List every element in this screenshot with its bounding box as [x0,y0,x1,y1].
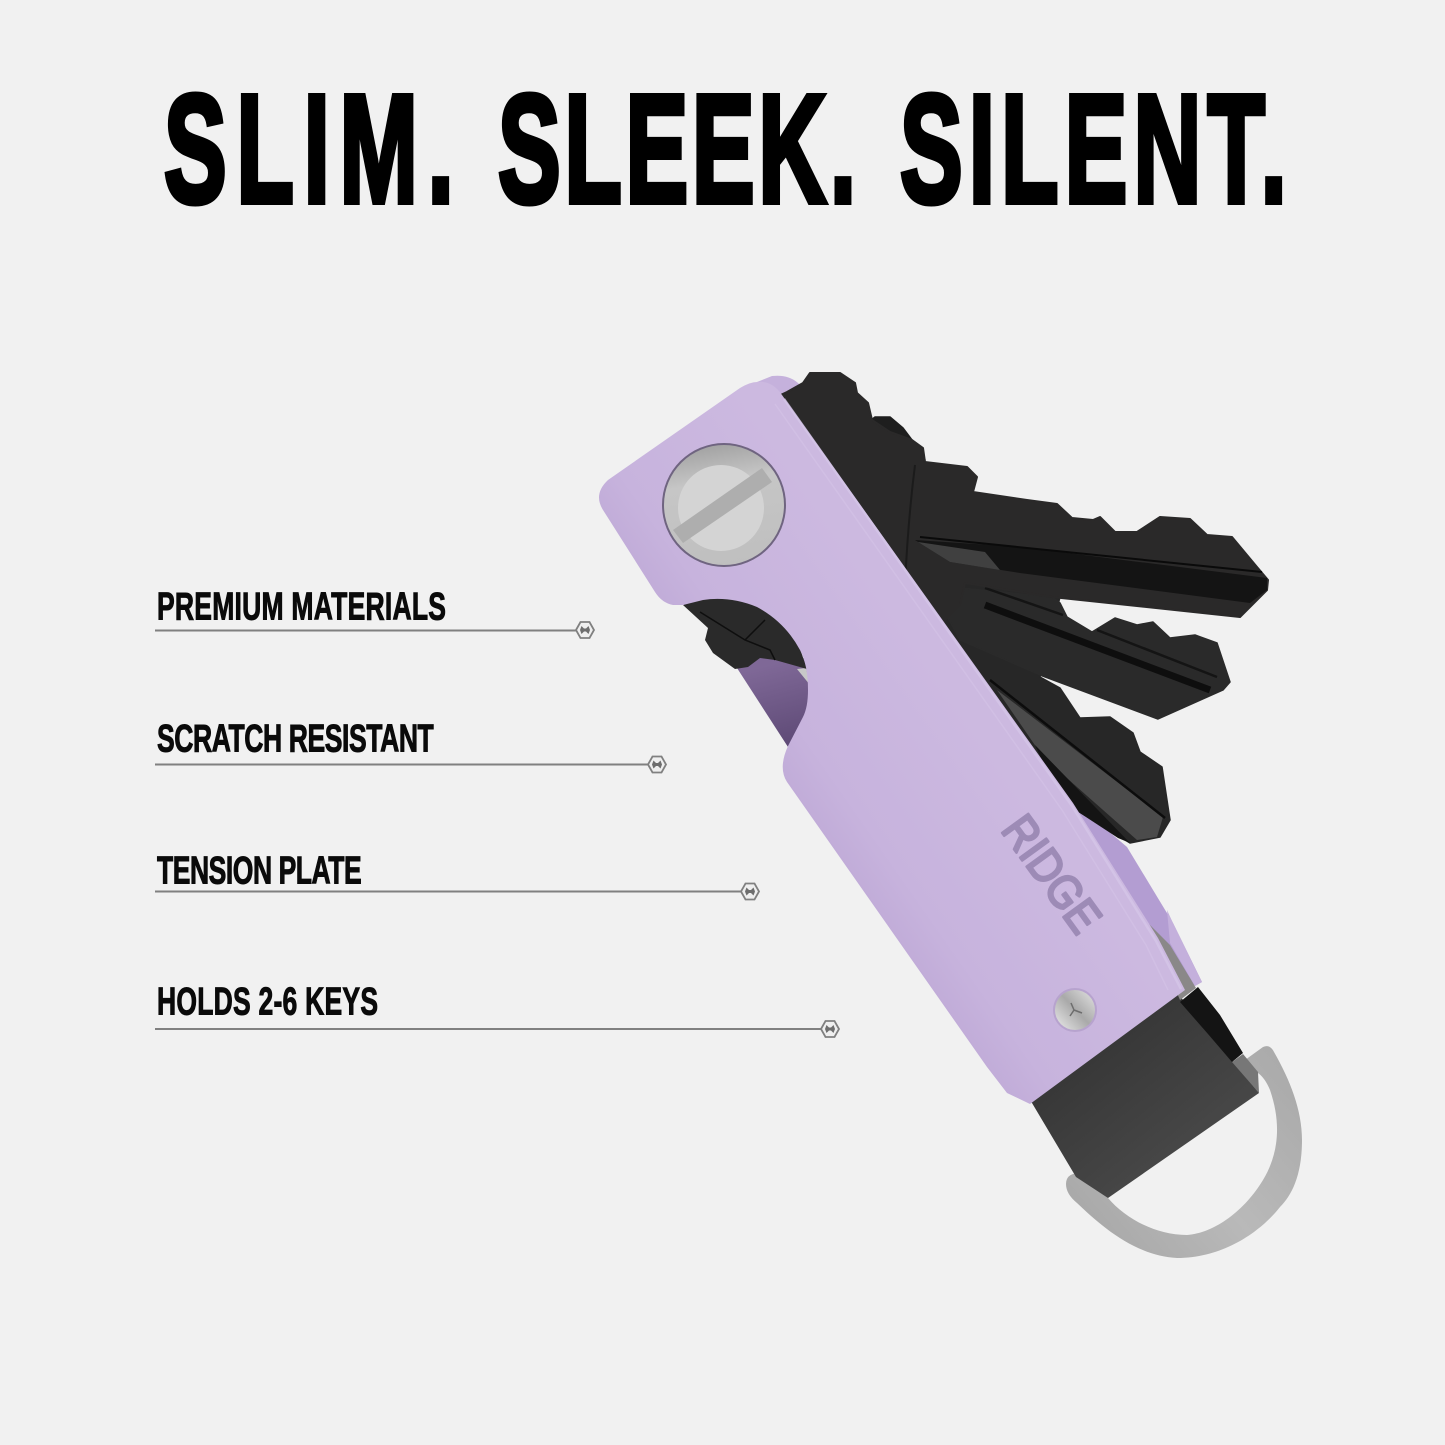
icon: hex marker keys [821,1021,839,1037]
callout: tension plate [155,850,759,900]
inner plate through notch [737,650,812,747]
key two [930,585,1230,719]
title: SLIM. [164,64,454,236]
icon: hex marker tension [741,884,759,900]
icon: hex marker scratch [648,756,666,772]
callout: premium materials [155,586,594,638]
front plate [599,382,1185,1104]
callout: holds keys [155,981,839,1037]
D-ring [1066,1046,1302,1258]
small screw [1053,988,1097,1032]
big slotted screw [662,443,786,567]
title [164,64,1287,236]
second key bow [865,417,925,460]
title: SILENT. [900,64,1287,236]
key bit in notch [683,590,807,669]
key one [770,373,1268,625]
icon: hex marker premium [576,622,594,638]
callout: holds keys: HOLDS 2-6 KEYS [157,981,378,1024]
callout: scratch resistant [155,718,666,772]
product: key holder [599,373,1302,1258]
black strap [1025,990,1259,1198]
back plate [1060,790,1202,986]
callout: premium materials: PREMIUM MATERIALS [157,586,446,629]
callout: tension plate: TENSION PLATE [157,850,362,893]
key three [900,560,1170,843]
logo: RIDGE: RIDGE [992,805,1112,943]
callout: scratch resistant: SCRATCH RESISTANT [157,718,434,761]
title: SLEEK. [498,64,856,236]
